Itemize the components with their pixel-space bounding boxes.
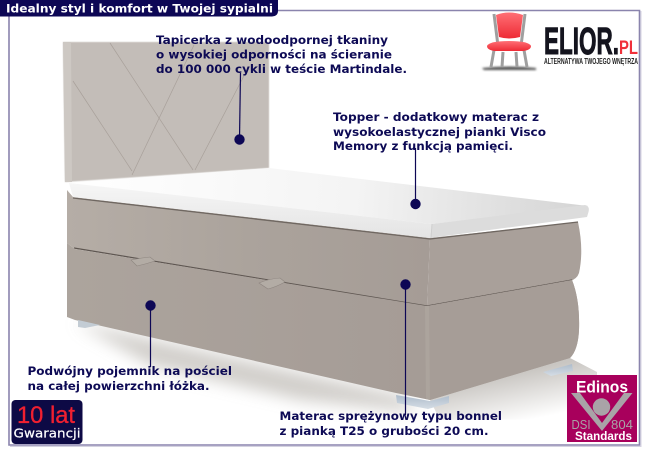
badge: Edinos DSI 804 standards xyxy=(567,375,637,443)
callout: storage xyxy=(28,300,232,393)
callout: upholstery xyxy=(156,33,407,145)
floor shadow xyxy=(75,322,597,420)
topper xyxy=(69,168,589,238)
upper box xyxy=(67,190,581,306)
badge: Edinos DSI 804 standards: 804 xyxy=(611,418,633,432)
callout: topper: wysokoelastycznej pianki Visco xyxy=(333,125,546,139)
badge: 10 lat gwarancji: Gwarancji xyxy=(14,426,80,440)
logo: Elior.pl xyxy=(482,12,638,70)
callout: mattress: Materac sprężynowy typu bonnel xyxy=(280,409,502,423)
lower box / storage xyxy=(67,243,579,400)
callout: upholstery: o wysokiej odporności na ścieranie xyxy=(156,48,392,62)
badge: 10 lat gwarancji xyxy=(12,400,82,444)
feet xyxy=(78,320,573,409)
callout: storage: Podwójny pojemnik na pościel xyxy=(28,364,232,378)
callout: topper: Topper - dodatkowy materac z xyxy=(333,110,539,124)
callout: topper xyxy=(333,110,546,209)
badge: Edinos DSI 804 standards: Edinos xyxy=(576,378,628,396)
callout: upholstery: do 100 000 cykli w teście Martindale. xyxy=(156,62,407,76)
illustration: box bed xyxy=(63,42,589,409)
handles xyxy=(131,257,285,289)
icon: red chair xyxy=(482,12,536,70)
badge: 10 lat gwarancji: 10 lat xyxy=(17,402,75,429)
badge: Edinos DSI 804 standards: DSI xyxy=(572,418,590,432)
logo: Elior.pl: PL xyxy=(619,38,638,59)
callout: storage: na całej powierzchni łóżka. xyxy=(28,379,210,393)
callout: upholstery: Tapicerka z wodoodpornej tkaniny xyxy=(156,33,389,47)
badge: Edinos DSI 804 standards: Standards xyxy=(575,429,632,443)
title bar: Idealny styl i komfort w Twojej sypialni xyxy=(6,2,273,16)
callout: topper: Memory z funkcją pamięci. xyxy=(333,139,513,153)
callout: mattress: z pianką T25 o grubości 20 cm. xyxy=(280,424,488,438)
callout: mattress xyxy=(280,279,502,438)
headboard xyxy=(63,42,269,182)
